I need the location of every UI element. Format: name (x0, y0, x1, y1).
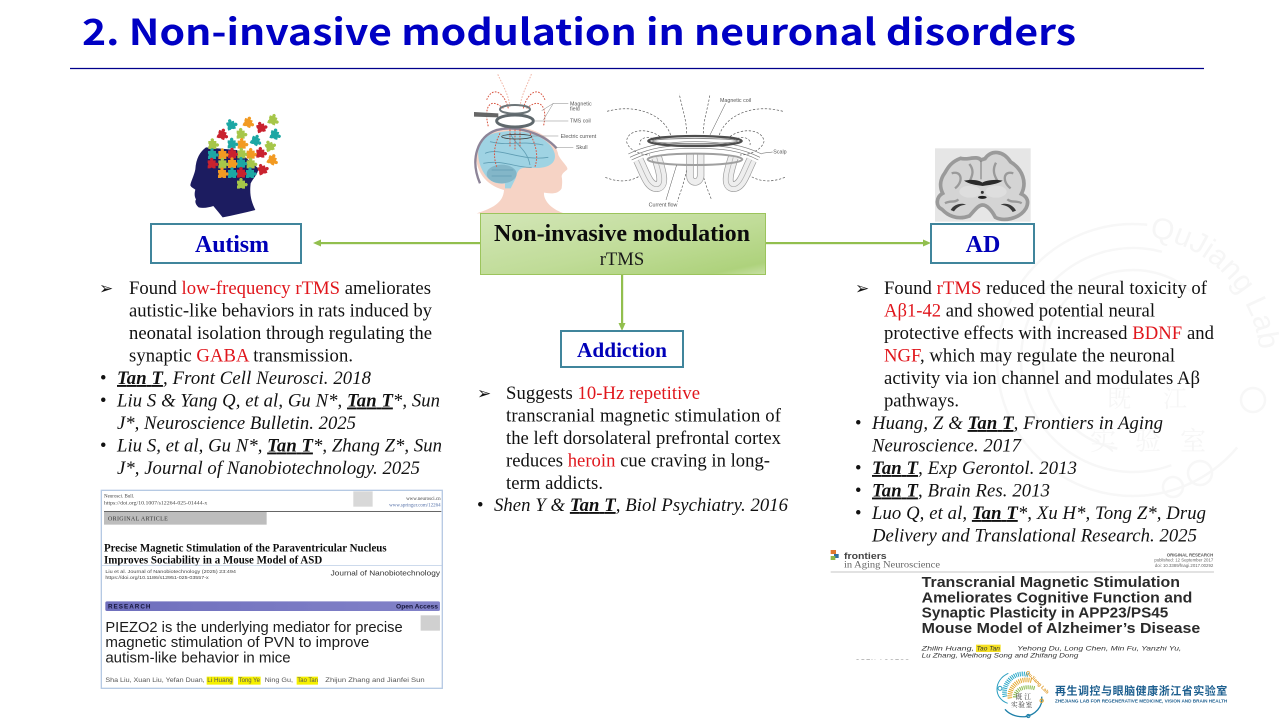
logo: Zhejiang Lab: 再生调控与眼脑健康浙江省实验室 (1055, 683, 1227, 699)
references: autism: Tan T, Front Cell Neurosci. 2018 (117, 368, 372, 389)
references: autism: • (100, 436, 107, 456)
paper thumbnails: autism publications: www.springer.com/12264 (389, 504, 441, 509)
references: autism: J*, Journal of Nanobiotechnology. 2025 (117, 458, 420, 479)
text block: addiction findings: transcranial magnetic stimulation of (506, 406, 782, 426)
paper thumbnails: autism publications: PIEZO2 is the underlying mediator for precise (105, 620, 403, 636)
references: AD: Tan T, Exp Gerontol. 2013 (872, 458, 1077, 479)
paper thumbnails: autism publications: Improves Sociability in a Mouse Model of ASD (104, 554, 322, 566)
logo: Zhejiang Lab: 既江 (1016, 691, 1033, 701)
illustration: TMS coil over head: Electric current (561, 134, 597, 140)
references: autism: Liu S & Yang Q, et al, Gu N*, Tan T*, Sun (116, 390, 440, 412)
connector arrow to Addiction (618, 275, 626, 331)
text block: autism findings: neonatal isolation through regulating the (129, 323, 432, 344)
paper thumbnail: Alzheimer's publication: doi: 10.3389/fnagi.2017.00292 (1155, 563, 1214, 568)
background watermark (1090, 218, 1279, 493)
illustration: TMS coil over head: field (570, 106, 580, 112)
paper thumbnails: autism publications: Tong Ye (239, 678, 261, 684)
text block: addiction findings: the left dorsolateral prefrontal cortex (506, 428, 782, 449)
paper thumbnail: Alzheimer's publication: Tao Tan (977, 645, 1000, 652)
text block: AD findings (855, 278, 1215, 412)
paper thumbnails: autism publications: https://doi.org/10.1186/s12951-025-03557-x (105, 575, 210, 580)
icon: coronal brain section (935, 148, 1031, 222)
background watermark: 实验室 (1090, 421, 1206, 458)
text block: AD findings: pathways. (884, 390, 959, 412)
paper thumbnails: autism publications: Ning Gu, (265, 678, 293, 684)
paper thumbnail: Alzheimer's publication: Ameliorates Cognitive Function and (922, 590, 1192, 606)
references: autism: Liu S, et al, Gu N*, Tan T*, Zhang Z*, Sun (116, 436, 442, 456)
paper thumbnail: Alzheimer's publication: Transcranial Magnetic Stimulation (922, 575, 1180, 591)
label box: Addiction (561, 331, 683, 367)
paper thumbnails: autism publications: Zhijun Zhang and Jianfei Sun (325, 678, 425, 684)
text block: addiction findings: term addicts. (506, 473, 603, 494)
paper thumbnail: Alzheimer's publication: published: 12 September 2017 (1154, 558, 1214, 563)
references: autism: • (100, 390, 107, 412)
logo: Zhejiang Lab: 实验室 (1011, 699, 1033, 709)
paper thumbnails: autism publications: ORIGINAL ARTICLE (108, 516, 168, 522)
paper thumbnail: Alzheimer's publication: frontiers (844, 551, 887, 561)
paper thumbnails: autism publications: Liu et al. Journal of Nanobiotechnology (2025) 23:494 (105, 569, 237, 574)
references: AD: Neuroscience. 2017 (871, 436, 1022, 456)
paper thumbnails: autism publications: Li Huang (207, 678, 233, 684)
paper thumbnails: autism publications: Tao Tan (297, 678, 318, 684)
paper thumbnails: autism publications: https://doi.org/10.1007/s12264-025-01444-x (104, 502, 208, 507)
text block: addiction findings: ➢ (477, 384, 491, 404)
paper thumbnails: autism publications (101, 490, 442, 688)
label box: Addiction: Addiction (577, 338, 667, 362)
paper thumbnail: Alzheimer's publication: Zhilin Huang, (920, 645, 974, 652)
references: autism: J*, Neuroscience Bulletin. 2025 (117, 413, 356, 434)
text block: autism findings: synaptic GABA transmission. (129, 346, 353, 366)
references: AD: • (855, 413, 862, 434)
references: AD: Tan T, Brain Res. 2013 (872, 480, 1050, 502)
paper thumbnail: Alzheimer's publication: OPEN ACCESS (855, 659, 910, 666)
connector arrow to AD (765, 240, 931, 246)
paper thumbnail: Alzheimer's publication: Lu Zhang, Weihong Song and Zhifang Dong (922, 653, 1079, 660)
text block: autism findings: Found low-frequency rTMS ameliorates (129, 278, 431, 299)
illustration: TMS coil over head (474, 73, 597, 213)
logo: Zhejiang Lab: ZHEJIANG LAB FOR REGENERATIVE MEDICINE, VISION AND BRAIN HEALTH (1055, 699, 1228, 704)
title: 2. Non-invasive modulation in neuronal disorders (82, 4, 1076, 56)
paper thumbnail: Alzheimer's publication: Synaptic Plasticity in APP23/PS45 (922, 606, 1168, 622)
references: AD: • (855, 458, 862, 479)
paper thumbnails: autism publications: Sha Liu, Xuan Liu, Yefan Duan, (105, 678, 205, 684)
label box: Autism: Autism (195, 232, 269, 258)
paper thumbnails: autism publications: Neurosci. Bull. (104, 494, 134, 499)
paper thumbnail: Alzheimer's publication: Mouse Model of Alzheimer’s Disease (922, 621, 1200, 637)
references: AD: • (855, 503, 862, 524)
paper thumbnail: Alzheimer's publication (831, 550, 1214, 666)
illustration: magnetic coil current flow: Current flow (649, 203, 678, 209)
text block: addiction findings (477, 383, 782, 494)
references: addiction: Shen Y & Tan T, Biol Psychiatry. 2016 (494, 495, 789, 516)
text block: AD findings: protective effects with increased BDNF and (884, 323, 1215, 344)
central box: Non-invasive modulation rTMS: Non-invasive modulation (494, 221, 750, 247)
references: AD: Huang, Z & Tan T, Frontiers in Aging (871, 413, 1163, 434)
text block: addiction findings: Suggests 10-Hz repetitive (506, 383, 700, 404)
text block: AD findings: Aβ1-42 and showed potential neural (884, 300, 1155, 322)
paper thumbnails: autism publications: www.neurosci.cn (406, 497, 441, 502)
text block: autism findings: ➢ (99, 279, 113, 299)
references: autism (100, 368, 442, 479)
central box: Non-invasive modulation rTMS: rTMS (600, 249, 644, 270)
illustration: magnetic coil current flow: Magnetic coil (720, 98, 751, 104)
paper thumbnails: autism publications: Journal of Nanobiotechnology (331, 569, 440, 578)
icon: head with puzzle pieces (190, 113, 282, 217)
text block: AD findings: ➢ (855, 279, 869, 299)
references: AD: • (855, 480, 862, 502)
text block: AD findings: activity via ion channel and modulates Aβ (884, 368, 1200, 389)
paper thumbnails: autism publications: autism-like behavior in mice (105, 650, 291, 666)
paper thumbnail: Alzheimer's publication: ORIGINAL RESEARCH (1167, 552, 1213, 557)
illustration: TMS coil over head: TMS coil (570, 119, 591, 125)
text block: addiction findings: reduces heroin cue craving in long- (506, 450, 770, 472)
references: addiction: • (477, 495, 484, 516)
illustration: magnetic coil current flow (605, 94, 787, 209)
logo: Zhejiang Lab: QuJiang Lab (1024, 670, 1050, 695)
illustration: TMS coil over head: Magnetic (570, 101, 592, 107)
paper thumbnail: Alzheimer's publication: Yehong Du, Long Chen, Min Fu, Yanzhi Yu, (1017, 645, 1182, 652)
references: AD: Luo Q, et al, Tan T*, Xu H*, Tong Z*, Drug (871, 503, 1206, 524)
logo: Zhejiang Lab (997, 670, 1228, 718)
paper thumbnails: autism publications: RESEARCH (108, 604, 152, 611)
paper thumbnails: autism publications: Precise Magnetic Stimulation of the Paraventricular Nucleus (104, 542, 387, 554)
text block: AD findings: NGF, which may regulate the neuronal (884, 346, 1175, 366)
paper thumbnails: autism publications: Open Access (396, 604, 438, 611)
illustration: TMS coil over head: Skull (576, 145, 588, 151)
central box: Non-invasive modulation rTMS (480, 214, 766, 274)
illustration: magnetic coil current flow: Scalp (773, 149, 787, 155)
references: autism: • (100, 368, 107, 389)
paper thumbnails: autism publications: magnetic stimulation of PVN to improve (105, 635, 369, 651)
text block: AD findings: Found rTMS reduced the neural toxicity of (884, 278, 1208, 299)
label box: Autism (151, 224, 301, 263)
references: AD (855, 413, 1206, 546)
references: AD: Delivery and Translational Research. 2025 (871, 526, 1197, 546)
text block: autism findings: autistic-like behaviors in rats induced by (129, 300, 433, 322)
label box: AD (931, 224, 1034, 263)
label box: AD: AD (966, 232, 1000, 258)
paper thumbnail: Alzheimer's publication: in Aging Neuroscience (844, 560, 940, 570)
background watermark: 既江 (1107, 379, 1187, 414)
text block: autism findings (99, 278, 433, 366)
connector arrow to Autism (313, 240, 480, 246)
